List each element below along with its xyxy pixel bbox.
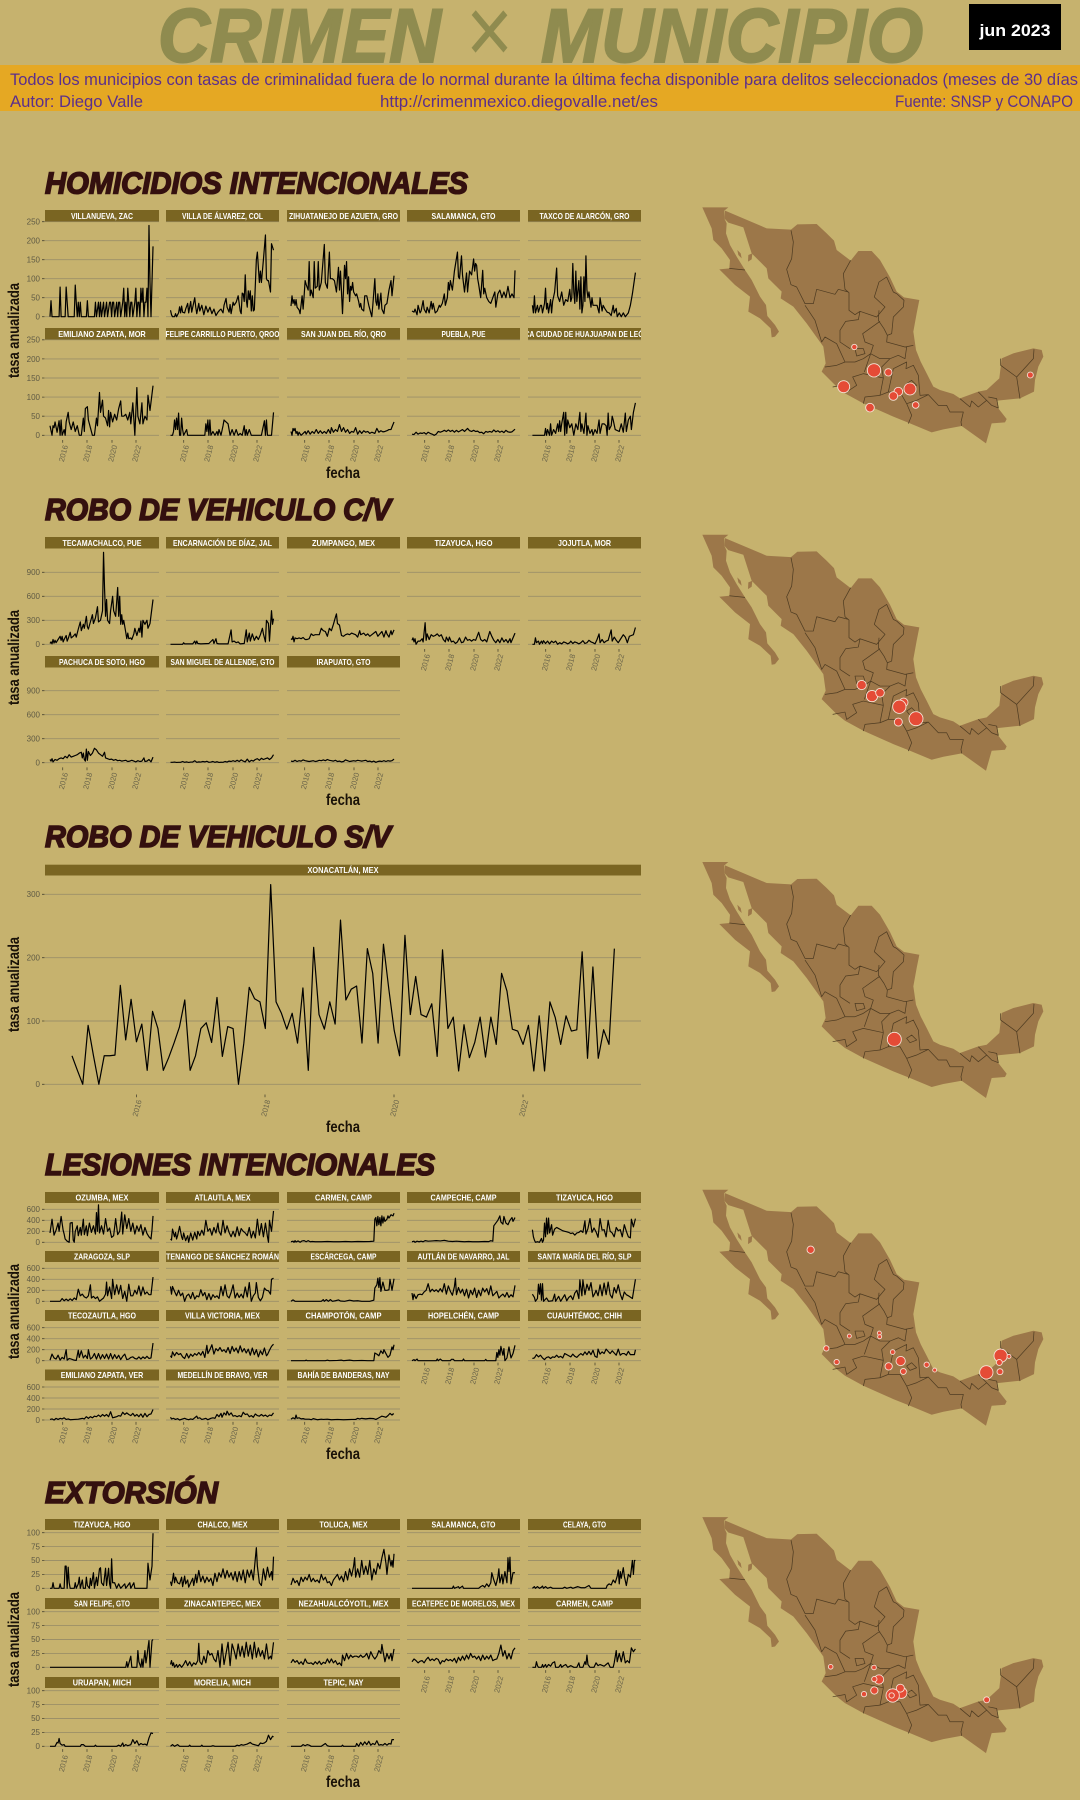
y axis labels: 600 — [27, 592, 41, 601]
chart: Irapuato — [287, 656, 400, 762]
x axis ticks: 2016 — [419, 444, 432, 463]
chart: Tepic — [287, 1677, 400, 1746]
x axis ticks: 2018 — [564, 1675, 577, 1694]
y axis labels: 0 — [36, 758, 41, 768]
x axis ticks: 2018 — [202, 444, 215, 463]
x axis ticks: 2016 — [131, 1099, 144, 1118]
x axis ticks: 2022 — [372, 772, 385, 790]
heading: extorsión: EXTORSIÓN — [45, 1475, 219, 1510]
x axis ticks: 2016 — [419, 1675, 432, 1694]
chart: Villa Victoria: VILLA VICTORIA, MEX — [185, 1311, 260, 1321]
chart: Medellín de Bravo — [166, 1370, 279, 1420]
x axis ticks: 2020 — [388, 1099, 401, 1118]
chart: Huajuapan de León: HEROICA CIUDAD DE HUAJUAPAN DE LEÓN, OAX — [504, 328, 667, 339]
chart: Uruapan — [45, 1677, 159, 1746]
chart: Emiliano Zapata VER: EMILIANO ZAPATA, VER — [61, 1370, 143, 1380]
chart: Villa Victoria — [166, 1310, 279, 1358]
chart: Tizayuca: TIZAYUCA, HGO — [74, 1520, 131, 1530]
chart: Autlán — [407, 1251, 520, 1300]
x axis ticks: 2020 — [589, 653, 602, 672]
chart: Ozumba — [45, 1192, 159, 1242]
chart: Puebla — [407, 328, 520, 435]
chart: San Felipe: SAN FELIPE, GTO — [74, 1599, 130, 1609]
y axis labels: 200 — [27, 954, 41, 962]
panel: extorsión — [6, 1475, 641, 1791]
x axis ticks: 2022 — [517, 1099, 530, 1118]
x axis ticks: 2018 — [259, 1099, 272, 1118]
chart: Tepic: TEPIC, NAY — [324, 1678, 364, 1688]
y axis labels: 0 — [36, 431, 41, 440]
chart: Encarnación de Díaz: ENCARNACIÓN DE DÍAZ, JAL — [173, 537, 272, 548]
x axis ticks: 2022 — [613, 653, 626, 672]
chart: Tizayuca — [45, 1519, 159, 1588]
x axis ticks: 2020 — [106, 1754, 119, 1773]
chart: Atlautla — [166, 1192, 279, 1242]
y axis labels: 600 — [27, 1324, 41, 1332]
x axis ticks: 2020 — [589, 1675, 602, 1694]
chart: Ozumba: OZUMBA, MEX — [76, 1193, 129, 1203]
y axis labels: 200 — [27, 1227, 41, 1236]
chart: Medellín de Bravo: MEDELLÍN DE BRAVO, VER — [178, 1370, 268, 1380]
chart: Pachuca: PACHUCA DE SOTO, HGO — [59, 657, 145, 667]
chart: Escárcega: ESCÁRCEGA, CAMP — [310, 1252, 377, 1262]
x axis ticks: 2018 — [564, 1367, 577, 1385]
y axis labels: 0 — [36, 1356, 41, 1366]
map: robo c/v — [702, 535, 1043, 771]
x axis ticks: 2016 — [57, 772, 70, 790]
y axis labels — [27, 1205, 45, 1425]
x axis ticks: 2022 — [130, 444, 143, 463]
chart: Villa de Álvarez — [166, 210, 279, 317]
x axis ticks: 2020 — [106, 772, 119, 790]
chart: Zumpango — [287, 537, 400, 642]
y axis labels: 100 — [27, 393, 41, 402]
y axis labels: 250 — [27, 218, 41, 226]
chart: Irapuato: IRAPUATO, GTO — [316, 657, 371, 667]
x axis ticks: 2016 — [57, 444, 70, 463]
chart: Carmen: CARMEN, CAMP — [315, 1193, 372, 1203]
chart: San Miguel de Allende — [166, 656, 279, 762]
chart: San Juan del Río: SAN JUAN DEL RÍO, QRO — [301, 329, 386, 339]
x axis ticks: 2018 — [443, 653, 456, 672]
chart: Tecozautla — [45, 1310, 159, 1360]
subtitle band: Autor: Diego Valle — [10, 92, 143, 111]
y axis labels: 100 — [27, 1017, 41, 1026]
chart: Zinacantepec — [166, 1598, 279, 1667]
x axis ticks: 2016 — [299, 444, 312, 463]
x axis ticks: 2020 — [106, 444, 119, 463]
chart: Santa María del Río: SANTA MARÍA DEL RÍO, SLP — [538, 1252, 632, 1262]
chart: Tecozautla: TECOZAUTLA, HGO — [68, 1311, 136, 1321]
chart: Ecatepec: ECATEPEC DE MORELOS, MEX — [412, 1599, 515, 1609]
chart: Hopelchén — [407, 1310, 520, 1361]
y axis labels: 200 — [27, 1405, 41, 1414]
chart: Salamanca — [407, 1519, 520, 1588]
x axis ticks: 2020 — [227, 1426, 240, 1445]
y axis labels: 0 — [36, 312, 41, 322]
chart: San Juan del Río — [287, 328, 400, 435]
y axis labels: 50 — [31, 1635, 41, 1644]
chart: Emiliano Zapata MOR: EMILIANO ZAPATA, MOR — [58, 329, 146, 339]
chart: Uruapan: URUAPAN, MICH — [73, 1678, 131, 1688]
chart: Encarnación de Díaz — [166, 537, 279, 644]
x axis ticks: 2016 — [178, 444, 191, 463]
panel: homicidios intencionales — [6, 166, 667, 482]
panel: robo de vehiculo s/v — [6, 819, 641, 1136]
chart: Villanueva — [45, 210, 159, 317]
x axis ticks — [57, 649, 626, 790]
chart: Nezahualcóyotl: NEZAHUALCÓYOTL, MEX — [298, 1598, 389, 1609]
x axis ticks: 2016 — [540, 1367, 553, 1385]
panel: robo de vehiculo c/v — [6, 492, 641, 809]
chart: Tecamachalco — [45, 537, 159, 644]
x axis ticks: 2022 — [130, 772, 143, 790]
x axis ticks: 2020 — [468, 1675, 481, 1694]
x axis ticks: 2018 — [323, 772, 336, 790]
x axis ticks: 2020 — [348, 444, 361, 463]
x axis ticks: 2016 — [57, 1426, 70, 1445]
y axis labels: 0 — [36, 1238, 41, 1247]
chart: Toluca — [287, 1519, 400, 1586]
chart: Hopelchén: HOPELCHÉN, CAMP — [428, 1311, 499, 1321]
x axis ticks: 2020 — [468, 653, 481, 672]
y axis labels: 75 — [31, 1542, 41, 1552]
x axis ticks: 2022 — [130, 1426, 143, 1445]
x axis ticks: 2018 — [323, 1754, 336, 1773]
chart: Pachuca — [45, 656, 159, 762]
x axis ticks: 2020 — [348, 1754, 361, 1773]
x axis ticks: 2022 — [372, 444, 385, 463]
x axis ticks: 2020 — [227, 1754, 240, 1773]
chart: Jojutla — [528, 537, 641, 644]
x axis ticks: 2018 — [202, 772, 215, 790]
y axis labels: 300 — [27, 890, 41, 899]
x axis ticks: 2018 — [443, 1675, 456, 1694]
chart: Taxco: TAXCO DE ALARCÓN, GRO — [540, 210, 630, 221]
x axis ticks: 2022 — [372, 1426, 385, 1445]
y axis labels: 200 — [27, 1346, 41, 1354]
chart: Tecamachalco: TECAMACHALCO, PUE — [62, 538, 142, 548]
x axis ticks: 2022 — [372, 1754, 385, 1773]
y axis labels: 900 — [27, 686, 41, 696]
x axis ticks: 2020 — [348, 772, 361, 790]
x axis ticks: 2016 — [540, 653, 553, 672]
y axis labels: 0 — [36, 1663, 41, 1672]
date badge — [969, 4, 1061, 50]
y axis labels: 75 — [31, 1700, 41, 1710]
x axis ticks: 2020 — [227, 772, 240, 790]
y axis labels: 100 — [27, 1608, 41, 1616]
y axis labels: 600 — [27, 1205, 41, 1214]
chart: Carmen — [528, 1598, 641, 1667]
y axis labels: 400 — [27, 1275, 41, 1284]
heading: robo s/v: ROBO DE VEHICULO S/V — [45, 819, 393, 854]
y axis labels: 200 — [27, 1286, 41, 1295]
x axis ticks: 2022 — [492, 653, 505, 672]
chart: Tizayuca: TIZAYUCA, HGO — [556, 1193, 613, 1203]
x axis ticks: 2018 — [81, 1426, 94, 1445]
y axis labels: 300 — [27, 734, 41, 744]
x axis ticks: 2016 — [299, 1426, 312, 1445]
axis title: fecha: fecha — [326, 792, 360, 809]
chart: Campeche — [407, 1192, 520, 1242]
x axis ticks: 2020 — [227, 444, 240, 463]
title — [158, 0, 923, 84]
chart: Tenango — [166, 1251, 279, 1301]
chart: Cuauhtémoc: CUAUHTÉMOC, CHIH — [547, 1311, 622, 1321]
chart: Escárcega — [287, 1251, 400, 1301]
y axis labels: 100 — [27, 274, 41, 284]
chart: Emiliano Zapata VER — [45, 1370, 159, 1420]
chart: Nezahualcóyotl — [287, 1598, 400, 1666]
y axis labels: 0 — [36, 1080, 41, 1089]
axis title: tasa anualizada: tasa anualizada — [6, 610, 23, 705]
x axis ticks: 2022 — [613, 1367, 626, 1385]
heading: lesiones: LESIONES INTENCIONALES — [45, 1147, 435, 1182]
y axis labels: 0 — [36, 1742, 41, 1751]
x axis ticks: 2016 — [299, 1754, 312, 1773]
x axis ticks: 2016 — [419, 653, 432, 672]
chart: Carmen — [287, 1192, 400, 1242]
y axis labels: 50 — [31, 1556, 41, 1565]
y axis labels: 50 — [31, 294, 41, 302]
chart: Huajuapan de León — [528, 328, 641, 436]
chart: Emiliano Zapata MOR — [45, 328, 159, 435]
y axis labels: 100 — [27, 1528, 41, 1538]
chart: Champotón — [287, 1310, 400, 1361]
x axis ticks: 2022 — [251, 772, 264, 790]
y axis labels: 600 — [27, 710, 41, 720]
y axis labels: 50 — [31, 1714, 41, 1723]
axis title: tasa anualizada: tasa anualizada — [6, 1264, 23, 1359]
x axis ticks: 2022 — [613, 444, 626, 463]
map: homicidios — [702, 207, 1043, 443]
y axis labels: 600 — [27, 1264, 41, 1273]
chart: Atlautla: ATLAUTLA, MEX — [194, 1193, 251, 1203]
chart: Villanueva: VILLANUEVA, ZAC — [71, 211, 133, 221]
y axis labels: 250 — [27, 336, 41, 345]
x axis ticks: 2016 — [540, 444, 553, 463]
x axis ticks: 2020 — [106, 1426, 119, 1445]
axis title: tasa anualizada: tasa anualizada — [6, 283, 23, 378]
y axis labels: 150 — [27, 256, 41, 264]
x axis ticks — [57, 1670, 626, 1773]
chart: Zihuatanejo: ZIHUATANEJO DE AZUETA, GRO — [289, 211, 398, 221]
panel: lesiones intencionales — [6, 1147, 641, 1463]
chart: San Miguel de Allende: SAN MIGUEL DE ALLENDE, GTO — [170, 657, 275, 667]
x axis ticks: 2016 — [419, 1367, 432, 1385]
x axis ticks: 2022 — [492, 444, 505, 463]
y axis labels — [27, 568, 45, 768]
chart: Bahía de Banderas — [287, 1370, 400, 1420]
x axis ticks: 2022 — [130, 1754, 143, 1773]
y axis labels: 0 — [36, 640, 41, 649]
chart: Xonacatlán — [45, 865, 641, 1084]
chart: Autlán: AUTLÁN DE NAVARRO, JAL — [418, 1252, 510, 1262]
x axis ticks: 2018 — [202, 1426, 215, 1445]
x axis ticks: 2018 — [564, 653, 577, 672]
chart: Jojutla: JOJUTLA, MOR — [558, 538, 611, 548]
chart: Salamanca — [407, 210, 520, 315]
chart: Tizayuca — [407, 537, 520, 644]
x axis ticks: 2020 — [468, 1367, 481, 1385]
heading: robo c/v: ROBO DE VEHICULO C/V — [45, 492, 393, 527]
x axis ticks: 2016 — [540, 1675, 553, 1694]
map: extorsión — [702, 1517, 1043, 1753]
chart: Carmen: CARMEN, CAMP — [556, 1599, 613, 1609]
chart: Chalco: CHALCO, MEX — [198, 1520, 248, 1530]
x axis ticks: 2018 — [443, 1367, 456, 1385]
chart: Taxco — [528, 210, 641, 317]
chart: Salamanca: SALAMANCA, GTO — [432, 1520, 496, 1530]
chart: Zinacantepec: ZINACANTEPEC, MEX — [184, 1599, 261, 1609]
y axis labels: 200 — [27, 236, 41, 246]
x axis ticks: 2018 — [81, 444, 94, 463]
chart: Morelia — [166, 1677, 279, 1746]
y axis labels: 0 — [36, 1297, 41, 1306]
chart: Zihuatanejo — [287, 210, 400, 317]
chart: Santa María del Río — [528, 1251, 641, 1301]
x axis ticks: 2022 — [251, 1426, 264, 1445]
y axis labels: 50 — [31, 412, 41, 421]
y axis labels: 75 — [31, 1622, 41, 1630]
y axis labels: 25 — [31, 1649, 41, 1658]
chart: Toluca: TOLUCA, MEX — [320, 1520, 368, 1530]
chart: Zumpango: ZUMPANGO, MEX — [312, 538, 375, 548]
chart: Salamanca: SALAMANCA, GTO — [432, 211, 496, 221]
map: lesiones — [702, 1190, 1043, 1426]
x axis ticks: 2018 — [564, 444, 577, 463]
x axis ticks: 2018 — [323, 444, 336, 463]
x axis ticks: 2022 — [251, 1754, 264, 1773]
y axis labels — [27, 1528, 45, 1751]
y axis labels: 200 — [27, 355, 41, 364]
x axis ticks: 2020 — [589, 444, 602, 463]
chart: Zaragoza: ZARAGOZA, SLP — [74, 1252, 130, 1262]
x axis ticks: 2016 — [178, 1426, 191, 1445]
x axis ticks: 2016 — [57, 1754, 70, 1773]
x axis ticks: 2018 — [443, 444, 456, 463]
x axis ticks: 2020 — [348, 1426, 361, 1445]
x axis ticks: 2016 — [178, 772, 191, 790]
x axis ticks: 2018 — [81, 1754, 94, 1773]
y axis labels: 600 — [27, 1383, 41, 1392]
chart: Tizayuca: TIZAYUCA, HGO — [434, 538, 493, 548]
chart: Felipe Carrillo Puerto: FELIPE CARRILLO PUERTO, QROO — [166, 329, 280, 339]
chart: Villa de Álvarez: VILLA DE ÁLVAREZ, COL — [182, 211, 263, 221]
chart: Morelia: MORELIA, MICH — [194, 1678, 251, 1688]
y axis labels — [27, 218, 45, 440]
map: robo s/v — [702, 862, 1043, 1098]
x axis ticks: 2018 — [323, 1426, 336, 1445]
chart: Cuauhtémoc — [528, 1310, 641, 1360]
axis title: fecha: fecha — [326, 1446, 360, 1463]
chart: Celaya: CELAYA, GTO — [563, 1520, 606, 1530]
chart: Ecatepec — [407, 1598, 520, 1664]
x axis ticks: 2022 — [251, 444, 264, 463]
x axis ticks: 2022 — [492, 1367, 505, 1385]
axis title: fecha: fecha — [326, 1119, 360, 1136]
chart: Tizayuca — [528, 1192, 641, 1242]
x axis ticks — [57, 1363, 626, 1445]
axis title: tasa anualizada: tasa anualizada — [6, 1592, 23, 1687]
x axis ticks: 2022 — [613, 1675, 626, 1694]
subtitle band: http://crimenmexico.diegovalle.net/es — [380, 92, 658, 111]
chart: Bahía de Banderas: BAHÍA DE BANDERAS, NAY — [298, 1370, 390, 1380]
x axis ticks — [57, 440, 626, 463]
chart: Zaragoza — [45, 1251, 159, 1301]
chart: Chalco — [166, 1519, 279, 1587]
chart: Champotón: CHAMPOTÓN, CAMP — [306, 1310, 382, 1321]
y axis labels: 900 — [27, 568, 41, 577]
x axis ticks: 2018 — [202, 1754, 215, 1773]
y axis labels: 0 — [36, 1584, 41, 1593]
y axis labels: 25 — [31, 1570, 41, 1579]
y axis labels: 0 — [36, 1416, 41, 1425]
y axis labels — [27, 890, 45, 1089]
y axis labels: 25 — [31, 1728, 41, 1737]
axis title: tasa anualizada: tasa anualizada — [6, 937, 23, 1032]
chart: Felipe Carrillo Puerto — [166, 328, 280, 435]
axis title: fecha: fecha — [326, 1774, 360, 1791]
x axis ticks — [131, 1094, 530, 1118]
x axis ticks: 2016 — [299, 772, 312, 790]
chart: Celaya — [528, 1519, 641, 1588]
x axis ticks: 2022 — [492, 1675, 505, 1694]
y axis labels: 400 — [27, 1334, 41, 1344]
subtitle band — [0, 65, 1080, 111]
axis title: fecha: fecha — [326, 465, 360, 482]
subtitle band: Todos los municipios con tasas de criminalidad fuera de lo normal durante la última fecha disponible para delitos seleccionados (meses de 30 días — [10, 70, 1078, 89]
x axis ticks: 2018 — [81, 772, 94, 790]
chart: Xonacatlán: XONACATLÁN, MEX — [308, 865, 379, 875]
chart: San Felipe — [45, 1598, 159, 1667]
y axis labels: 400 — [27, 1216, 41, 1225]
y axis labels: 300 — [27, 616, 41, 625]
y axis labels: 100 — [27, 1686, 41, 1696]
y axis labels: 150 — [27, 374, 41, 383]
date badge: jun 2023 — [978, 21, 1050, 40]
chart: Tenango: TENANGO DE SÁNCHEZ ROMÁN — [166, 1252, 279, 1262]
x axis ticks: 2020 — [468, 444, 481, 463]
heading: homicidios: HOMICIDIOS INTENCIONALES — [45, 166, 468, 200]
chart: Puebla: PUEBLA, PUE — [442, 329, 486, 339]
x axis ticks: 2016 — [178, 1754, 191, 1773]
x axis ticks: 2020 — [589, 1367, 602, 1385]
chart: Campeche: CAMPECHE, CAMP — [430, 1193, 497, 1203]
y axis labels: 400 — [27, 1394, 41, 1403]
